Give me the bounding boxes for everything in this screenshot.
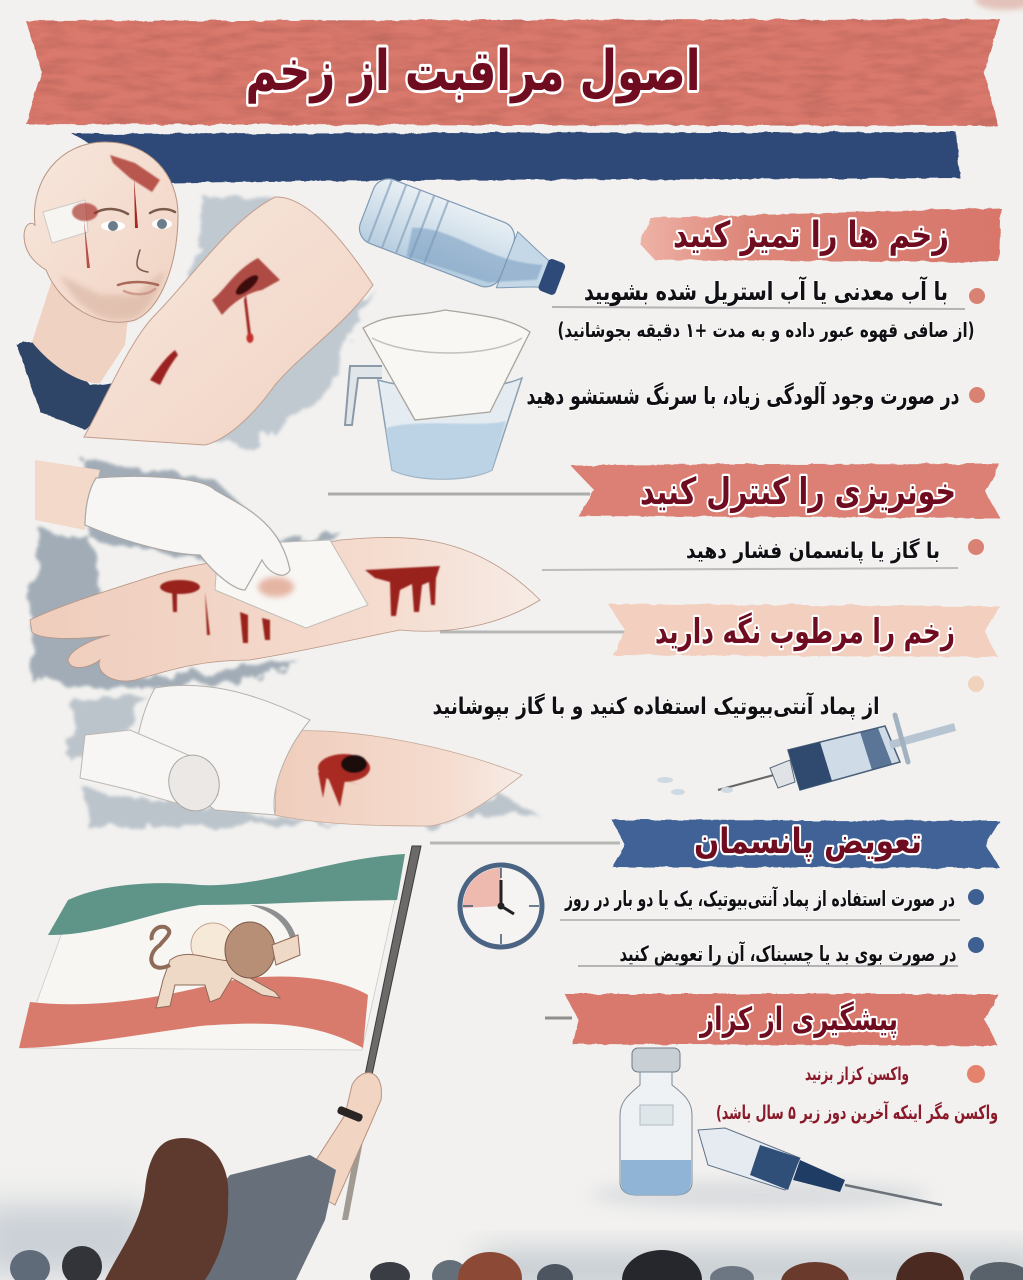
green stripe [48, 854, 405, 935]
syringe [698, 1128, 800, 1190]
stubble [60, 270, 165, 320]
hair [105, 1138, 228, 1280]
head [24, 142, 178, 322]
jug handle [345, 366, 382, 425]
wound [318, 754, 370, 807]
jacket [175, 1155, 336, 1280]
paper filter [363, 310, 530, 420]
icon: clock [460, 865, 542, 947]
bullet 2 [968, 937, 984, 953]
bullet dot [968, 539, 984, 555]
illustration: gloved hand pressing gauze [30, 458, 540, 690]
section banner: control bleeding [328, 464, 1000, 518]
eyes [101, 219, 172, 231]
forearm [84, 197, 373, 445]
arm [275, 731, 522, 826]
bullet dot [967, 1065, 985, 1083]
bullet list: clean wounds [526, 276, 985, 410]
watercolor shadow [190, 195, 375, 445]
heading: پیشگیری از کزاز [698, 1000, 898, 1038]
illustration: bandaged arm [70, 685, 540, 830]
head wounds [72, 155, 160, 268]
vial [632, 1048, 680, 1072]
crowd heads [10, 1246, 1023, 1280]
mist [0, 1205, 150, 1275]
bullet 1 [969, 288, 985, 304]
arm wounds [150, 258, 280, 385]
bullet: pressure [542, 537, 984, 570]
section banner: change dressing [430, 820, 1000, 868]
heading: تعویض پانسمان [694, 822, 922, 862]
gauze [215, 540, 368, 628]
brows, nose, mouth [95, 209, 175, 294]
neck [32, 280, 130, 383]
section banner: tetanus [545, 994, 998, 1046]
shirt [17, 342, 130, 430]
droplets [657, 777, 733, 795]
blood [160, 566, 440, 643]
gauze wrap [135, 685, 310, 815]
water in jug [386, 421, 506, 479]
shadow [30, 458, 340, 690]
bullet list: tetanus [716, 1064, 998, 1124]
bullet 1 [968, 889, 984, 905]
forehead bandage [43, 200, 88, 243]
ground shadow [590, 1181, 930, 1209]
illustration: vial and syringe [590, 1048, 942, 1209]
illustration: coffee filter and jug [345, 310, 530, 479]
title banner [26, 19, 1000, 126]
illustration: crowd and protester [0, 1073, 1023, 1280]
upper arm [35, 460, 100, 530]
text: با گاز یا پانسمان فشار دهید [686, 537, 940, 564]
section banner: clean wounds [640, 208, 1001, 262]
illustration: injured man and arm [17, 142, 375, 445]
heading: زخم ها را تمیز کنید [673, 215, 949, 256]
shadow [70, 695, 540, 830]
bullet: ointment [432, 676, 984, 720]
raised arm [300, 1073, 381, 1205]
red stripe [19, 977, 368, 1048]
illustration: small syringe [657, 715, 955, 795]
elapsed sector [463, 868, 501, 908]
white field [20, 900, 395, 1050]
bottle cap [537, 258, 566, 296]
bullet dot [968, 676, 984, 692]
navy brush stripe [72, 132, 960, 183]
hand and arm [30, 537, 540, 681]
glove [85, 476, 290, 590]
bullet 2 [969, 387, 985, 403]
illustration: flag [19, 846, 421, 1220]
text: از پماد آنتی‌بیوتیک استفاده کنید و با گاز بپوشانید [432, 691, 880, 720]
bandage roll [80, 730, 218, 810]
corner smudge [975, 0, 1023, 10]
illustration: water bottle [355, 174, 572, 312]
section banner: keep moist [440, 604, 1000, 657]
bullet list: change dressing [560, 886, 984, 966]
lion and sun emblem [151, 905, 300, 1008]
pole [365, 846, 421, 1075]
text 1: واکسن کزاز بزنید [805, 1064, 909, 1085]
jug [378, 378, 522, 479]
title: اصول مراقبت از زخم [246, 39, 700, 104]
water in bottle [402, 216, 543, 303]
